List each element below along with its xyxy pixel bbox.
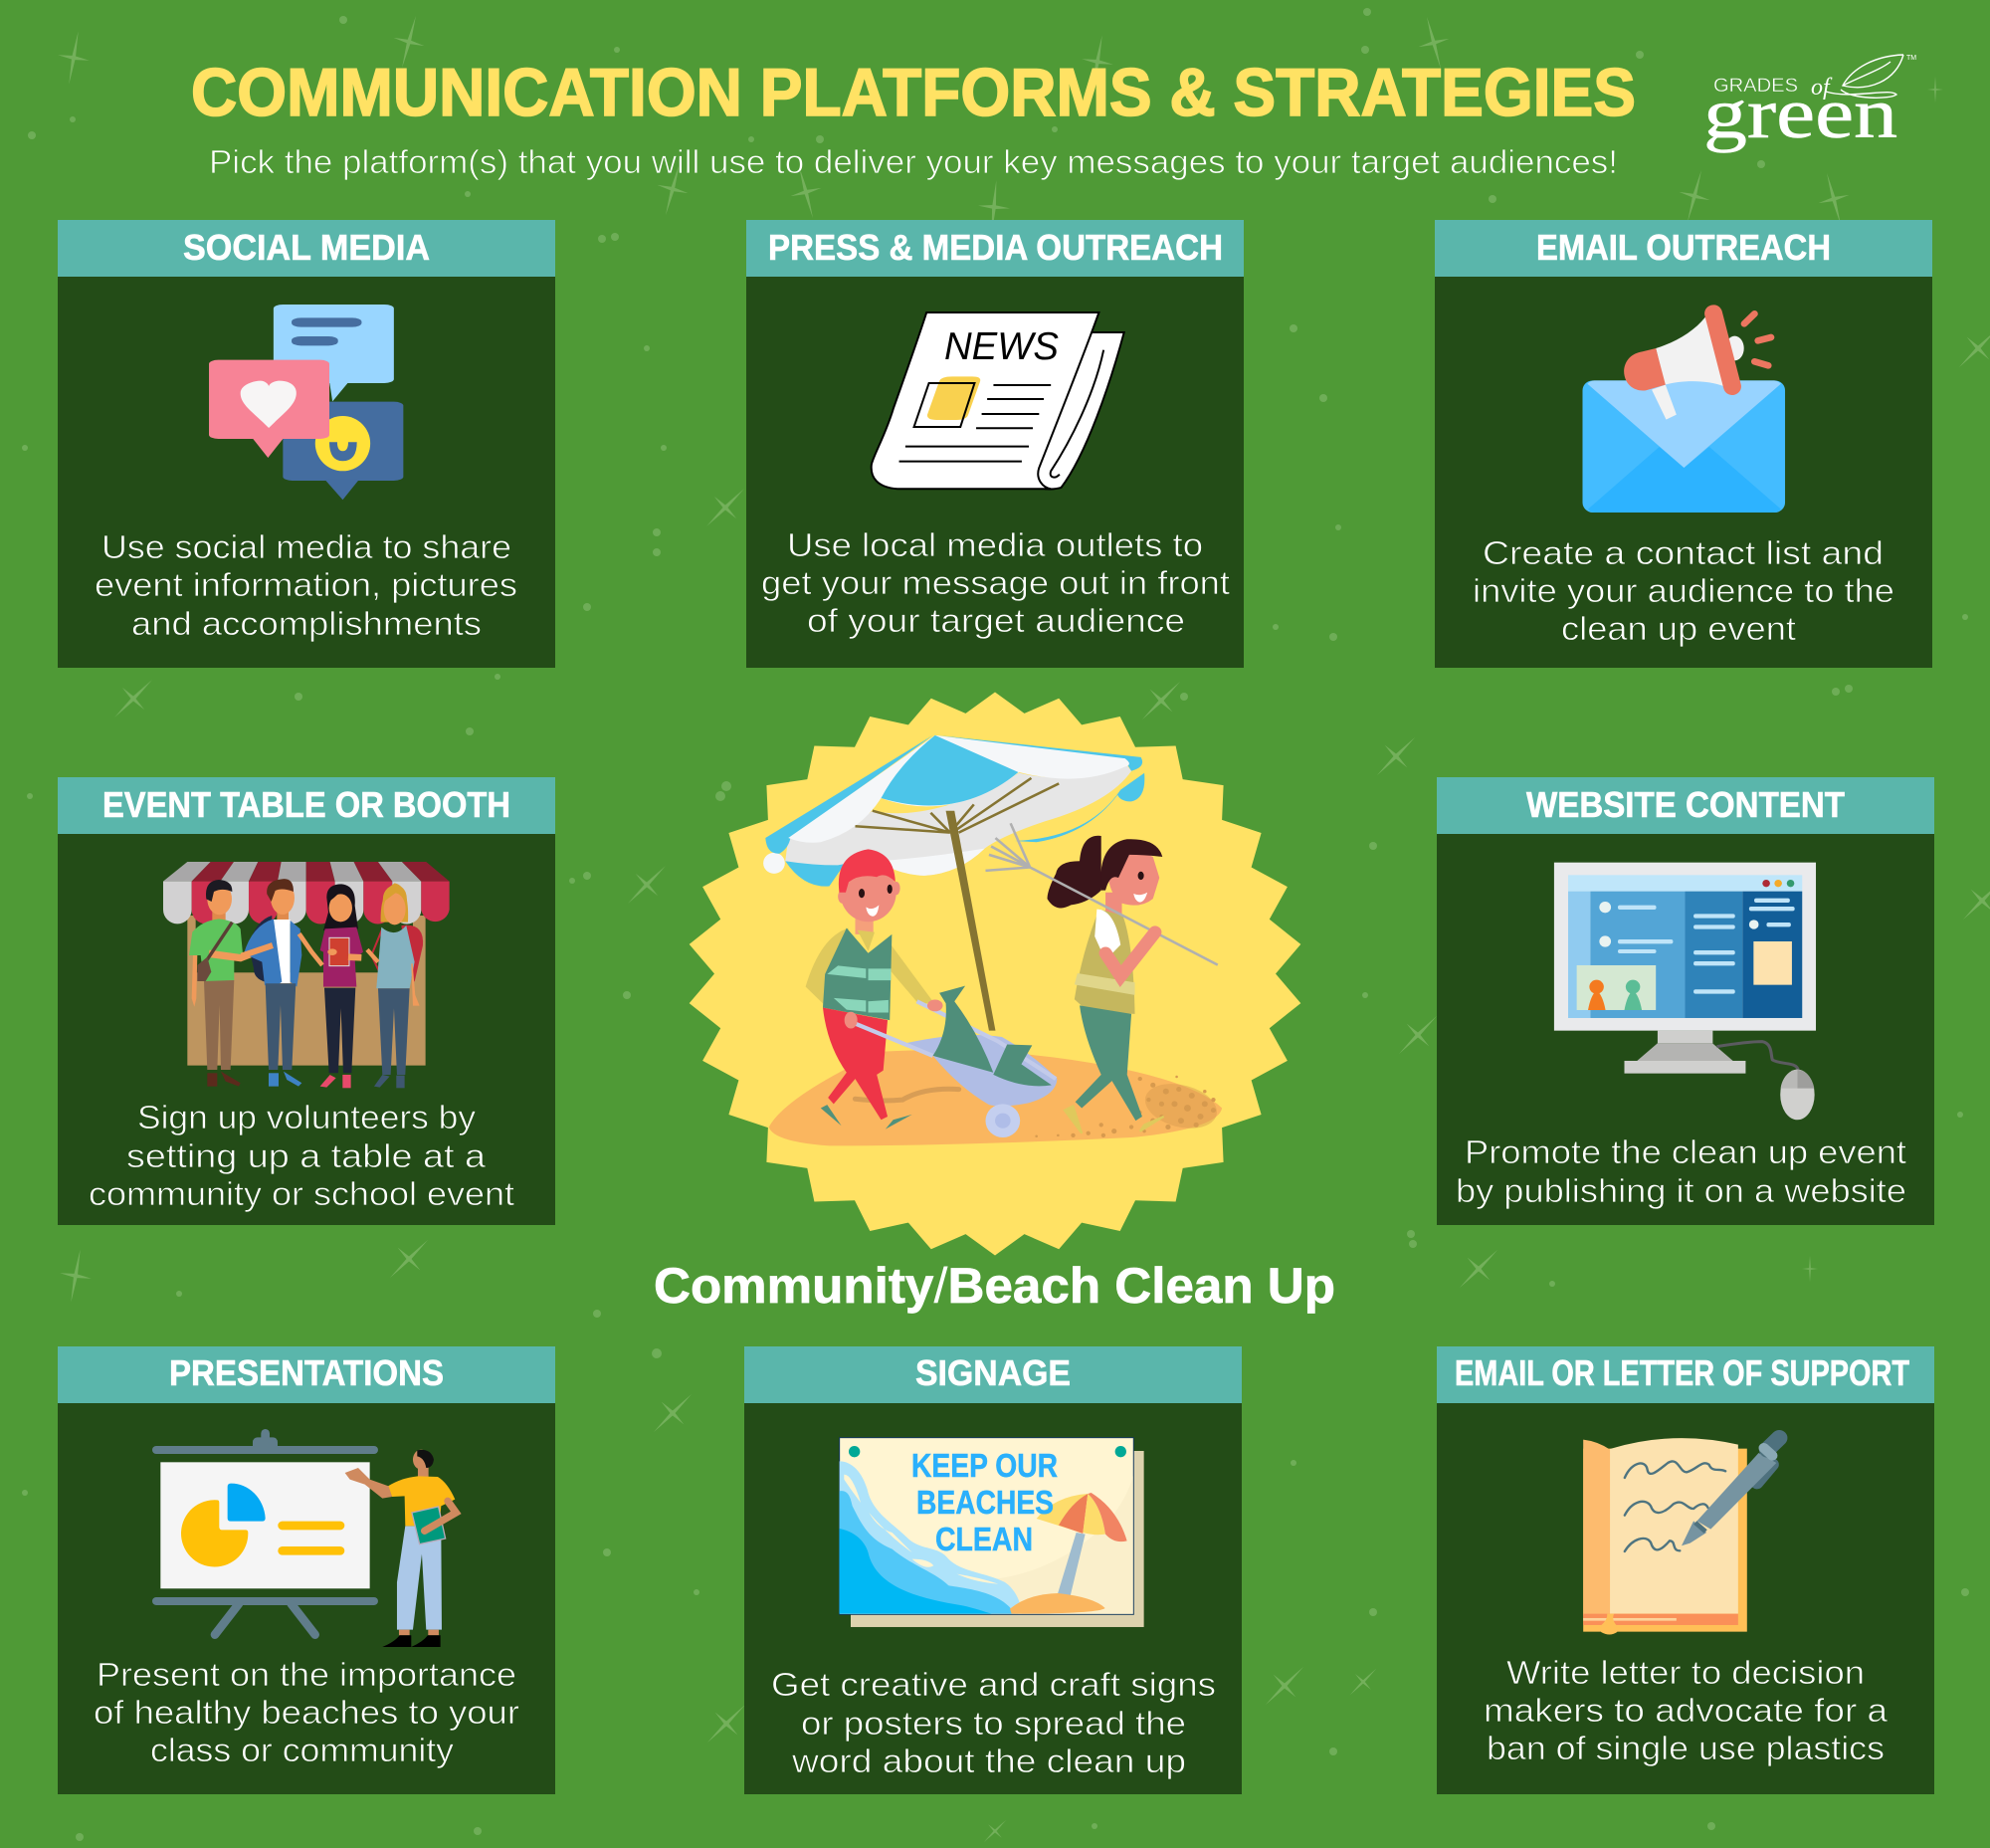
text: social media	[95, 528, 517, 642]
volunteer with rake	[985, 823, 1218, 1133]
text: presentations: Present on the importance	[97, 1656, 516, 1693]
person: blue jacket	[242, 879, 301, 1087]
icon: beach poster sign: BEACHES	[916, 1484, 1054, 1521]
icon: newspaper	[872, 312, 1124, 489]
presenter	[345, 1450, 456, 1647]
panel: email or letter of support	[1437, 1346, 1934, 1794]
text: website content: Promote the clean up event	[1465, 1133, 1906, 1170]
volunteer with wheelbarrow	[806, 849, 1057, 1137]
icon: newspaper: NEWS	[944, 325, 1059, 368]
icon: beach poster sign	[840, 1438, 1144, 1627]
heading: website content: WEBSITE CONTENT	[1526, 784, 1845, 825]
panel: presentations	[58, 1346, 555, 1794]
heading: website content	[1437, 777, 1934, 834]
logo: Grades of Green: GRADES	[1713, 76, 1798, 97]
title: COMMUNICATION PLATFORMS & STRATEGIES	[191, 55, 1636, 130]
beach umbrella	[763, 735, 1144, 1031]
heading: email outreach	[1435, 220, 1932, 277]
icon: notebook and pen	[1583, 1438, 1779, 1634]
text: social media: event information, pictures	[95, 566, 517, 603]
text: email outreach	[1473, 534, 1894, 647]
panel: social media	[58, 220, 555, 668]
center caption: Community/Beach Clean Up	[654, 1258, 1335, 1314]
text: signage	[771, 1666, 1216, 1779]
logo: Grades of Green	[1703, 55, 1916, 153]
icon: chat bubbles	[209, 305, 403, 500]
heading: signage: SIGNAGE	[915, 1352, 1071, 1393]
text: press and media: Use local media outlets to	[787, 526, 1203, 563]
text: presentations: class or community	[150, 1732, 455, 1768]
icon: desktop computer and mouse	[1554, 863, 1816, 1120]
text: email outreach: Create a contact list and	[1483, 534, 1884, 571]
text: email or letter	[1484, 1654, 1889, 1766]
text: website content	[1456, 1133, 1906, 1209]
heading: email outreach: EMAIL OUTREACH	[1536, 227, 1831, 268]
text: event table: Sign up volunteers by	[137, 1099, 477, 1135]
heading: signage	[744, 1346, 1242, 1403]
text: event table: setting up a table at a	[126, 1137, 487, 1174]
central badge: beach clean up illustration	[690, 693, 1300, 1256]
text: signage: Get creative and craft signs	[771, 1666, 1216, 1703]
text: email or letter: ban of single use plastics	[1487, 1730, 1885, 1766]
panel: email outreach	[1435, 220, 1932, 668]
text: press and media: of your target audience	[807, 602, 1185, 639]
text: presentations	[94, 1656, 519, 1768]
text: signage: word about the clean up	[791, 1743, 1186, 1779]
logo: Grades of Green: TM	[1906, 55, 1916, 62]
panel: website content	[1437, 777, 1934, 1225]
text: event table	[89, 1099, 514, 1212]
text: presentations: of healthy beaches to your	[94, 1694, 519, 1731]
heading: event table: EVENT TABLE OR BOOTH	[102, 784, 510, 825]
person: light blue shirt	[367, 883, 423, 1088]
icon: booth with volunteers	[163, 862, 450, 1088]
heading: social media: SOCIAL MEDIA	[183, 227, 430, 268]
person: magenta shirt	[299, 884, 363, 1088]
text: event table: community or school event	[89, 1175, 514, 1212]
icon: presentation board and presenter	[152, 1429, 456, 1647]
text: signage: or posters to spread the	[801, 1705, 1186, 1742]
icon: envelope with megaphone	[1582, 313, 1785, 513]
heading: press and media: PRESS & MEDIA OUTREACH	[768, 227, 1223, 268]
text: press and media: get your message out in front	[761, 564, 1230, 601]
scene illustration	[763, 735, 1222, 1145]
text: email outreach: clean up event	[1561, 610, 1796, 647]
panel: signage	[744, 1346, 1242, 1794]
text: email or letter: Write letter to decision	[1506, 1654, 1865, 1691]
text: website content: by publishing it on a website	[1456, 1172, 1906, 1209]
heading: presentations	[58, 1346, 555, 1403]
icon: beach poster sign: KEEP OUR	[911, 1447, 1058, 1484]
panel: event table or booth	[58, 777, 555, 1225]
text: social media: Use social media to share	[101, 528, 511, 565]
text: email or letter: makers to advocate for a	[1484, 1692, 1889, 1729]
heading: social media	[58, 220, 555, 277]
sand	[769, 1050, 1222, 1145]
text: social media: and accomplishments	[131, 605, 482, 642]
panel: press and media outreach	[746, 220, 1244, 668]
heading: presentations: PRESENTATIONS	[169, 1352, 444, 1393]
starburst	[690, 693, 1300, 1256]
heading: event table	[58, 777, 555, 834]
icon: beach poster sign: CLEAN	[935, 1521, 1033, 1557]
subtitle: Pick the platform(s) that you will use to deliver your key messages to your target audiences!	[209, 143, 1618, 180]
person: green shirt	[189, 880, 273, 1087]
heading: email or letter	[1437, 1346, 1934, 1403]
heading: press and media	[746, 220, 1244, 277]
logo: Grades of Green: of	[1811, 75, 1833, 101]
logo: Grades of Green: green	[1703, 74, 1897, 153]
text: email outreach: invite your audience to the	[1473, 572, 1894, 609]
text: press and media	[761, 526, 1230, 639]
